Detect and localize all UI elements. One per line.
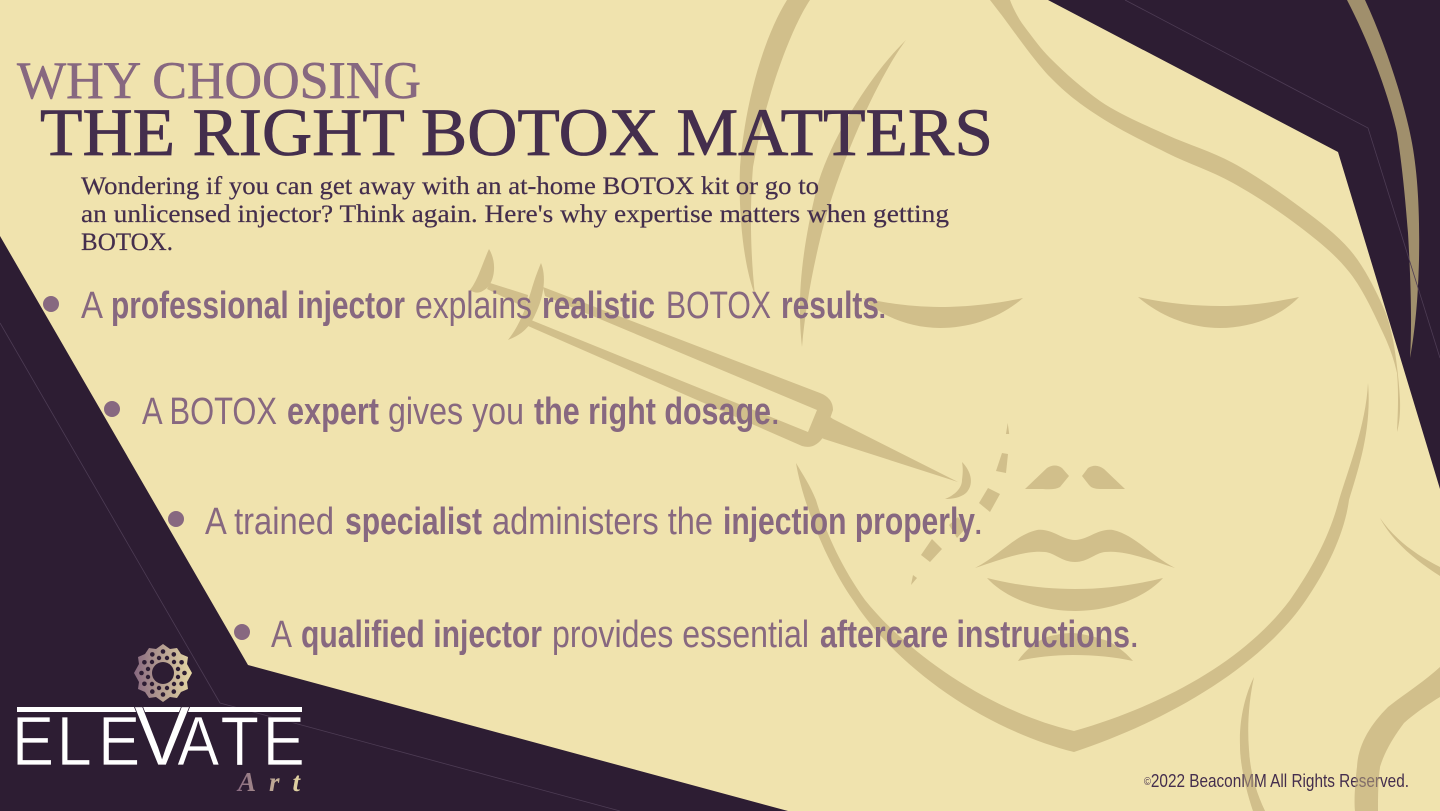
- neck left: [1240, 677, 1265, 811]
- heading: the right botox matters: THE RIGHT BOTOX MATTERS: [40, 94, 993, 170]
- nose right: [1082, 466, 1125, 489]
- forehead and cheek hairline: [990, 0, 1400, 432]
- nose left: [1025, 466, 1069, 489]
- bullet 1: professional injector: BOTOX: [666, 285, 771, 327]
- upper lip: [975, 530, 1175, 568]
- puncture crescent: [945, 462, 971, 499]
- right eye: [1138, 297, 1299, 328]
- logo script: Art: [236, 767, 301, 797]
- dark panel: top right: [1048, 0, 1440, 489]
- intro paragraph: [81, 173, 950, 256]
- dark panel: bottom left: [0, 236, 788, 811]
- bullet 4: qualified injector: provides essential: [552, 614, 809, 656]
- bullet 2: botox expert: A BOTOX: [142, 391, 277, 433]
- hair strand on dark panel: [1347, 0, 1419, 358]
- logo wordmark: ATE: [177, 703, 305, 781]
- intro paragraph: BOTOX.: [81, 229, 173, 256]
- bullet 1: professional injector: .: [877, 285, 888, 327]
- bullet 2: botox expert: the right dosage: [534, 391, 771, 433]
- bullet 3: trained specialist: specialist: [345, 501, 482, 543]
- bullet 2: botox expert: expert: [287, 391, 379, 433]
- copyright: ©: [1144, 776, 1151, 788]
- bullet 3: trained specialist: A trained: [205, 501, 334, 543]
- logo wordmark: [12, 689, 305, 783]
- icon: mandala emblem: [134, 644, 192, 702]
- hair strand left outer: [740, 0, 810, 295]
- bullet 1: professional injector: A: [81, 285, 104, 327]
- neck overlay on copyright: [1240, 745, 1380, 811]
- plunger rod: [487, 283, 528, 308]
- bullet 1: professional injector: results: [781, 285, 879, 327]
- bullet 4: qualified injector: [234, 614, 1140, 656]
- heading: why choosing: WHY CHOOSING: [17, 52, 421, 110]
- bullet 3: trained specialist: administers the: [492, 501, 713, 543]
- barrel: [528, 287, 833, 447]
- left eye: [863, 298, 1023, 328]
- bullet 2: botox expert: [104, 391, 781, 433]
- bullet 4: qualified injector: aftercare instructions: [820, 614, 1130, 656]
- bullet 2: botox expert: .: [770, 391, 781, 433]
- neck right: [1355, 667, 1440, 811]
- needle: [818, 414, 958, 482]
- shoulder strand: [1380, 518, 1440, 576]
- bullet 4: qualified injector: .: [1129, 614, 1140, 656]
- logo wordmark: V: [134, 689, 190, 783]
- hair strand left inner: [800, 40, 906, 347]
- bullet 3: trained specialist: .: [973, 501, 984, 543]
- plunger flange: [470, 249, 494, 293]
- illustration: woman's face line art: [740, 0, 1440, 811]
- intro paragraph: Wondering if you can get away with an at-home BOTOX kit or go to: [81, 173, 819, 200]
- logo wordmark: ELE: [12, 703, 140, 781]
- bullet 1: professional injector: [43, 285, 888, 327]
- icon: syringe: [470, 249, 971, 499]
- logo top bar: [17, 707, 302, 712]
- barrel flange: [508, 263, 544, 340]
- intro paragraph: an unlicensed injector? Think again. Here's why expertise matters when getting: [81, 201, 950, 228]
- injection dashed guide: [911, 423, 1009, 585]
- chin crease: [1018, 633, 1133, 661]
- logo: elevate: [12, 644, 305, 797]
- lower lip: [987, 578, 1163, 611]
- bullet 4: qualified injector: qualified injector: [301, 614, 542, 656]
- bullet 3: trained specialist: injection properly: [723, 501, 975, 543]
- bullet 1: professional injector: professional injector: [111, 285, 405, 327]
- bullet 2: botox expert: gives you: [388, 391, 524, 433]
- bullet 1: professional injector: realistic: [542, 285, 655, 327]
- bullet 4: qualified injector: A: [271, 614, 293, 656]
- bullet 3: trained specialist: [168, 501, 984, 543]
- jaw line: [796, 383, 1369, 752]
- bullet 1: professional injector: explains: [415, 285, 532, 327]
